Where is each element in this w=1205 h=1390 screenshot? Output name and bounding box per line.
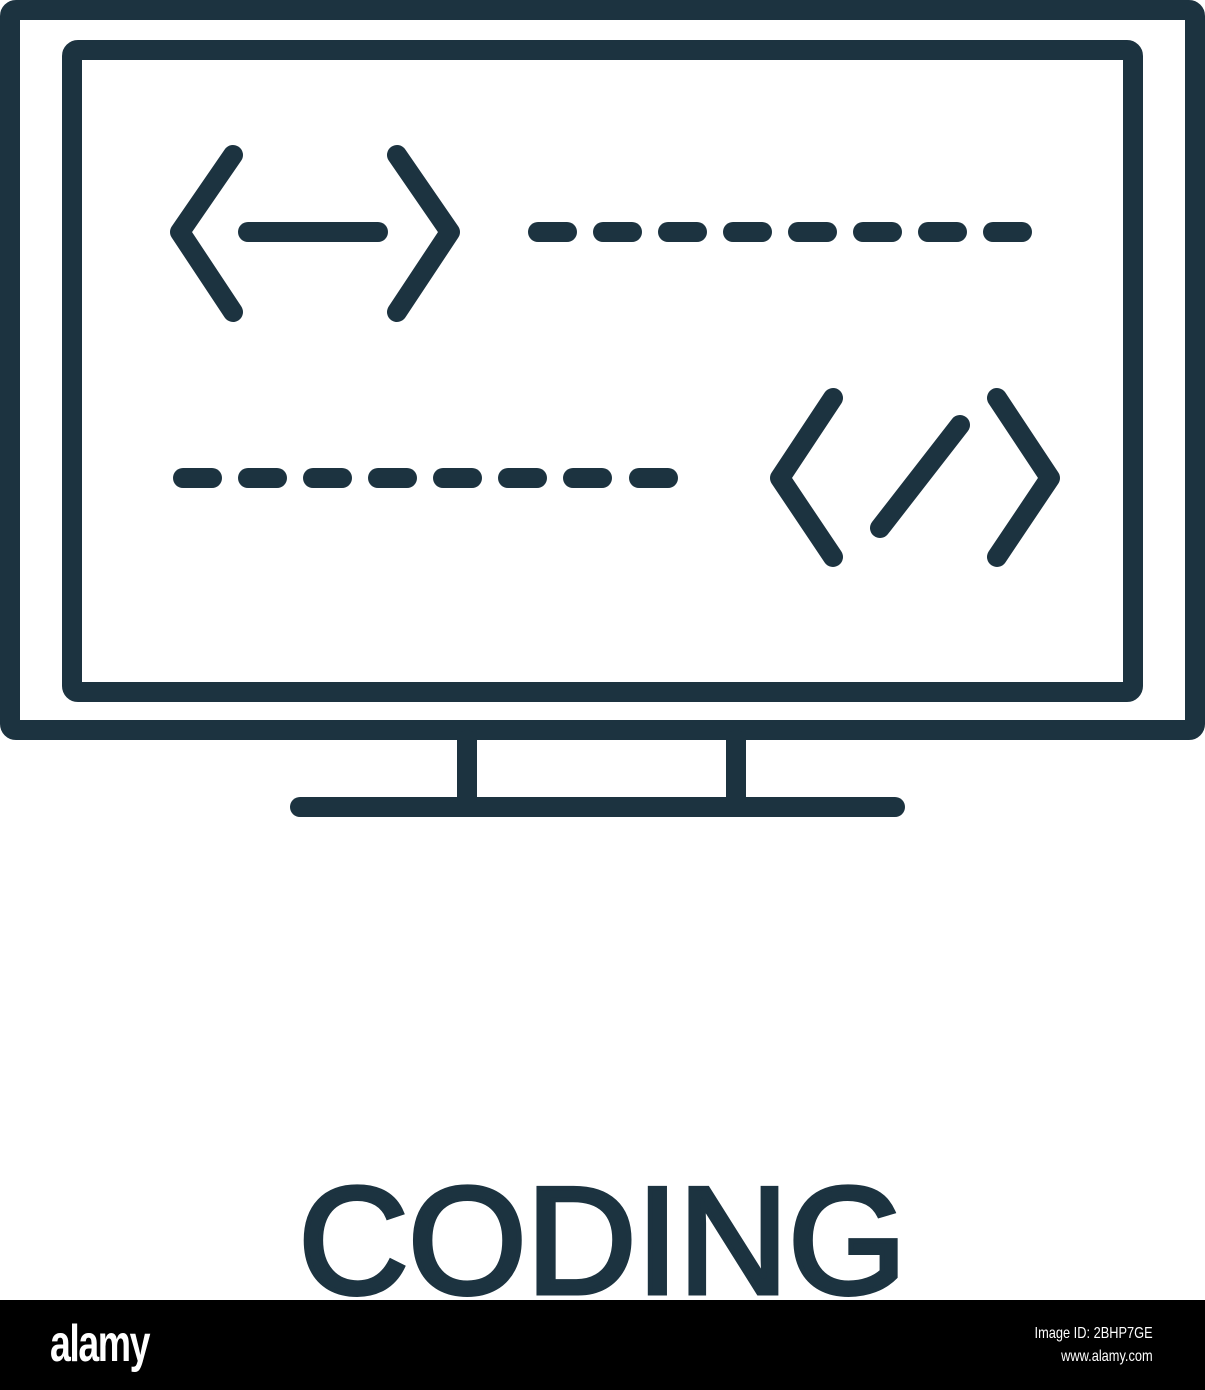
monitor frame: [10, 10, 1195, 807]
code row 2 dashes: [183, 468, 668, 488]
code row 2: closing tag: [780, 398, 1050, 557]
code row 1 dashes: [538, 222, 1022, 242]
image id: [1035, 1325, 1153, 1365]
code row 1: arrow brackets: [180, 155, 450, 312]
icon: monitor with code: [0, 0, 1205, 817]
image id: www.alamy.com: [1061, 1348, 1153, 1365]
footer bar: [0, 1300, 1205, 1390]
title: CODING: [298, 1156, 906, 1326]
logo: alamy: [50, 1315, 149, 1373]
image id: Image ID: 2BHP7GE: [1035, 1325, 1153, 1342]
